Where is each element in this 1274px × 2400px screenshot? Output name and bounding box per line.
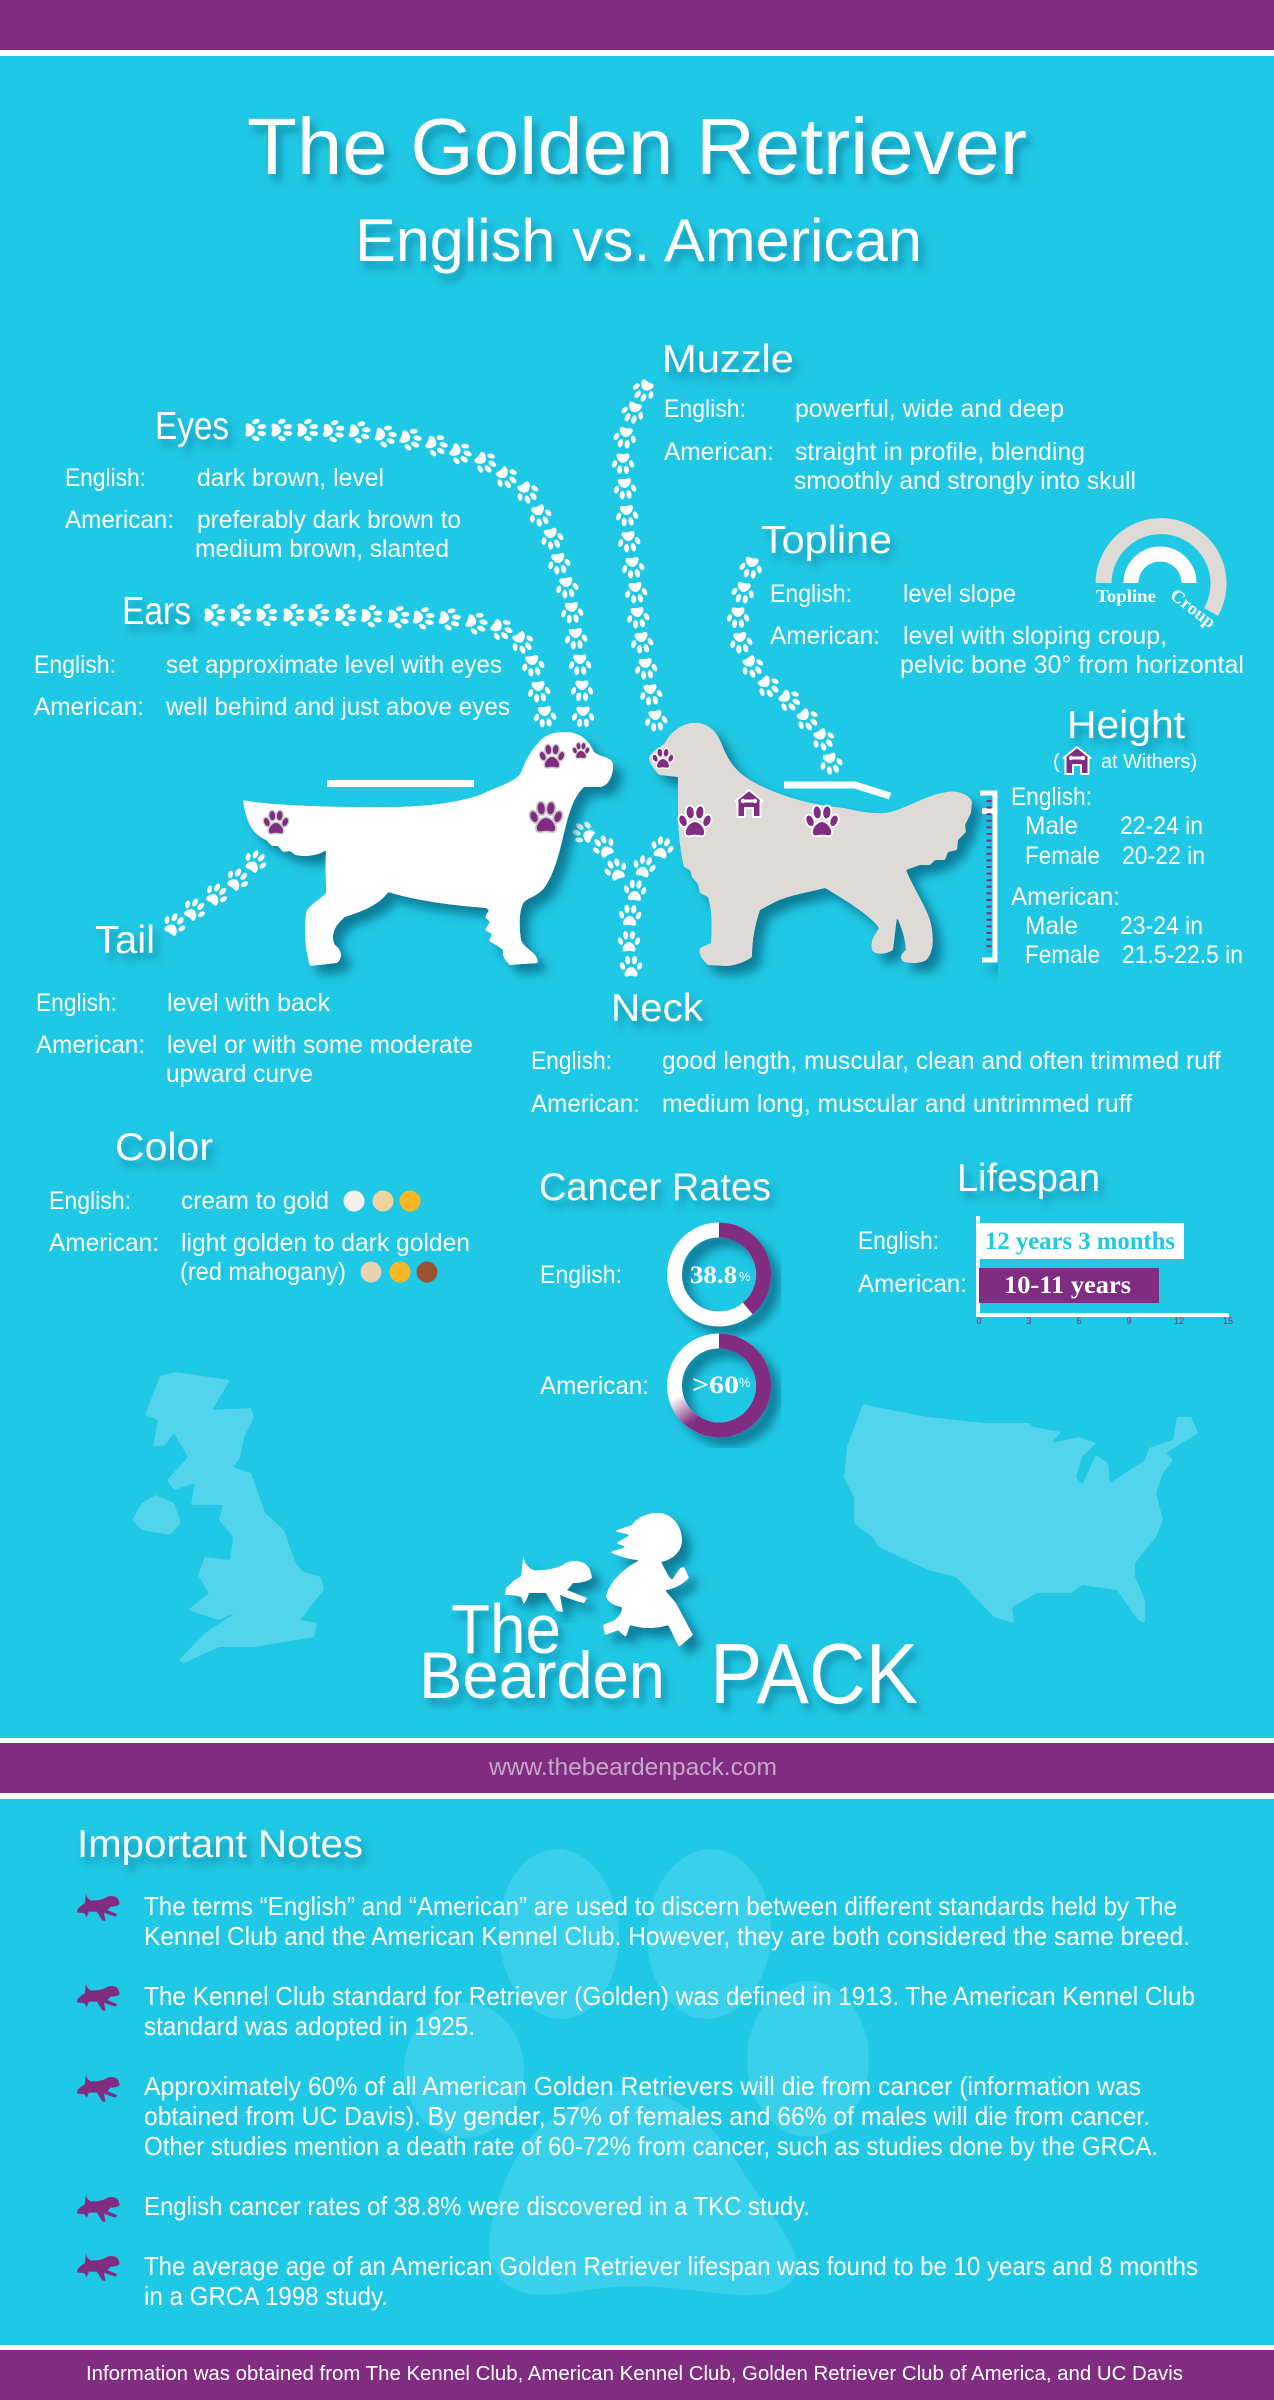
panel: color: light golden to dark golden [181,1229,470,1257]
panel: ears: English: [34,651,116,679]
panel: eyes: dark brown, level [197,464,384,492]
bullet icon: puppy [77,2194,120,2222]
heading: neck: Neck [611,987,704,1030]
paw trail: topline [726,556,846,777]
note 4: English cancer rates of 38.8% were discovered in a TKC study. [144,2191,810,2221]
map: United Kingdom [132,1372,324,1663]
panel: ears: American: [34,693,144,721]
panel: neck: good length, muscular, clean and often trimmed ruff [662,1047,1221,1075]
panel: tail: level with back [167,989,330,1017]
panel: color: cream to gold [181,1187,329,1215]
panel: tail: English: [36,989,117,1017]
bar chart: lifespan in years: 9 [1126,1316,1132,1326]
heading: lifespan: Lifespan [957,1157,1100,1200]
logo wordmark: Bearden [419,1638,665,1712]
panel: muzzle: smoothly and strongly into skull [794,467,1136,495]
bar chart: lifespan in years: 12 years 3 months [985,1228,1175,1255]
panel: cancer rates: American: [540,1372,649,1400]
donut: American over 60% [674,1341,764,1430]
icon: doghouse at withers [736,790,762,817]
panel: muzzle: straight in profile, blending [795,438,1085,466]
American colour swatches [360,1262,438,1282]
logo wordmark: The [451,1590,561,1668]
American topline bar with sloping croup [784,785,890,796]
panel: ears: set approximate level with eyes [166,651,502,679]
note 1 [144,1891,1190,1951]
bullet icon: puppy [77,2074,120,2102]
panel: height: English: [1011,783,1092,811]
note 5: in a GRCA 1998 study. [144,2281,388,2311]
panel: height: 23-24 in [1120,912,1203,940]
panel: topline [761,519,1244,679]
heading: topline: Topline [761,519,892,562]
panel: lifespan: American: [858,1270,967,1298]
heading: height: Height [1067,704,1185,747]
faint large paw watermark [404,1846,869,2295]
bar chart: lifespan in years: 15 [1223,1316,1233,1326]
panel: neck [531,987,1221,1118]
English colour swatches [344,1190,420,1212]
logo: The Bearden Pack [419,1513,918,1722]
panel: height: Female [1025,842,1100,870]
note 1: The terms “English” and “American” are used to discern between different standards held by The [144,1891,1177,1921]
panel: ears [34,590,510,721]
panel: eyes [65,405,461,563]
panel: height: 22-24 in [1120,812,1203,840]
heading: eyes: Eyes [155,405,229,448]
paw markers on English dog [263,743,590,833]
diagram: topline and croup arcs [1096,526,1220,632]
bullet icon: puppy [77,1893,120,1921]
footer sources banner: Information was obtained from The Kennel Club, American Kennel Club, Golden Retriever Club of America, and UC Davis [86,2363,1183,2385]
panel: eyes: preferably dark brown to [197,506,461,534]
panel: ears: well behind and just above eyes [165,693,510,721]
paw trail: neck [568,817,677,976]
panel: cancer rates [539,1166,771,1430]
panel: cancer rates: >60 [692,1372,739,1399]
panel: muzzle [662,338,1136,495]
footer sources banner [0,2345,1274,2400]
note 2: standard was adopted in 1925. [144,2011,475,2041]
panel: height: Male [1025,812,1078,840]
panel: important notes [77,1823,1198,2311]
panel: lifespan: English: [858,1227,939,1255]
heading: muzzle: Muzzle [662,338,794,381]
panel: muzzle: English: [664,395,746,423]
bar chart: lifespan in years: 3 [1026,1316,1032,1326]
panel: height: 21.5-22.5 in [1122,941,1243,969]
paw trail: tail [159,846,271,939]
top purple banner [0,0,1274,56]
logo wordmark [419,1590,918,1722]
logo icon: puppy [505,1555,592,1612]
diagram: topline and croup arcs: Croup [1167,584,1220,632]
panel: tail: level or with some moderate [167,1031,473,1059]
panel: height: Male [1025,912,1078,940]
icon: doghouse [1064,747,1090,774]
panel: height [1011,704,1243,969]
bar chart: lifespan in years: 10-11 years [1004,1272,1131,1299]
bullet icon: puppy [77,2253,120,2281]
panel: color [49,1126,470,1286]
paw trail: muzzle [611,376,670,733]
panel: eyes: medium brown, slanted [195,535,449,563]
diagram: topline and croup arcs: Topline [1096,586,1156,606]
panel: topline: pelvic bone 30° from horizontal [900,651,1244,679]
bar chart: lifespan in years [976,1216,1233,1326]
panel: cancer rates: English: [540,1261,622,1289]
panel: color: American: [49,1229,159,1257]
note 5 [144,2251,1198,2311]
donut: English 38.8% [674,1230,764,1319]
panel: tail [36,919,473,1088]
note 2 [144,1981,1195,2041]
bullet icon: puppy [77,1983,120,2011]
height ruler bracket [980,793,995,960]
note 2: The Kennel Club standard for Retriever (Golden) was defined in 1913. The American Kennel Club [144,1981,1195,2011]
panel: topline: American: [770,622,880,650]
panel: neck: medium long, muscular and untrimmed ruff [662,1090,1132,1118]
panel: neck: English: [531,1047,612,1075]
paw markers on American dog [652,749,839,835]
website banner: www.thebeardenpack.com [488,1754,777,1781]
panel: topline: English: [770,580,852,608]
panel: height: American: [1011,883,1120,911]
bar chart: lifespan in years: 0 [976,1316,982,1326]
heading: color: Color [115,1126,213,1169]
English topline bar [327,780,474,787]
panel: height: ( [1053,751,1060,773]
panel: lifespan [858,1157,1233,1326]
panel: tail: American: [36,1031,145,1059]
panel: height: 20-22 in [1122,842,1205,870]
heading: ears: Ears [122,590,191,633]
panel: muzzle: powerful, wide and deep [795,395,1064,423]
panel: topline: level slope [903,580,1016,608]
note 3: Other studies mention a death rate of 60-72% from cancer, such as studies done by the GRCA. [144,2131,1158,2161]
paw trail: eyes [246,418,595,727]
map: United States [844,1404,1198,1623]
panel: cancer rates: 38.8 [690,1262,737,1289]
title: The Golden Retriever [247,102,1027,191]
grey American dog silhouette [649,723,972,966]
title: English vs. American [355,207,922,274]
panel: eyes: English: [65,464,146,492]
panel: muzzle: American: [664,438,774,466]
note 3 [144,2071,1158,2161]
heading: cancer rates: Cancer Rates [539,1166,771,1209]
panel: tail: upward curve [166,1060,313,1088]
panel: neck: American: [531,1090,640,1118]
bar chart: lifespan in years: 12 [1174,1316,1184,1326]
white English dog silhouette [243,732,613,966]
panel: color: English: [49,1187,131,1215]
website banner [0,1738,1274,1799]
note 5: The average age of an American Golden Retriever lifespan was found to be 10 years and 8 months [144,2251,1198,2281]
paw trail: ears [205,603,558,728]
note 3: obtained from UC Davis). By gender, 57% of females and 66% of males will die from cancer. [144,2101,1150,2131]
heading: important notes: Important Notes [77,1823,363,1866]
title [247,102,1027,274]
panel: cancer rates: % [739,1375,751,1390]
note 3: Approximately 60% of all American Golden Retrievers will die from cancer (information was [144,2071,1141,2101]
panel: eyes: American: [65,506,174,534]
panel: cancer rates: % [739,1269,751,1284]
panel: topline: level with sloping croup, [903,622,1167,650]
panel: height: at Withers) [1101,751,1197,773]
bar chart: lifespan in years: 6 [1076,1316,1082,1326]
note 1: Kennel Club and the American Kennel Club. However, they are both considered the same breed. [144,1921,1190,1951]
logo icon: running child [603,1513,693,1647]
heading: tail: Tail [95,919,155,962]
panel: height: Female [1025,941,1100,969]
logo wordmark: PACK [710,1627,918,1722]
panel: color: (red mahogany) [180,1258,346,1286]
